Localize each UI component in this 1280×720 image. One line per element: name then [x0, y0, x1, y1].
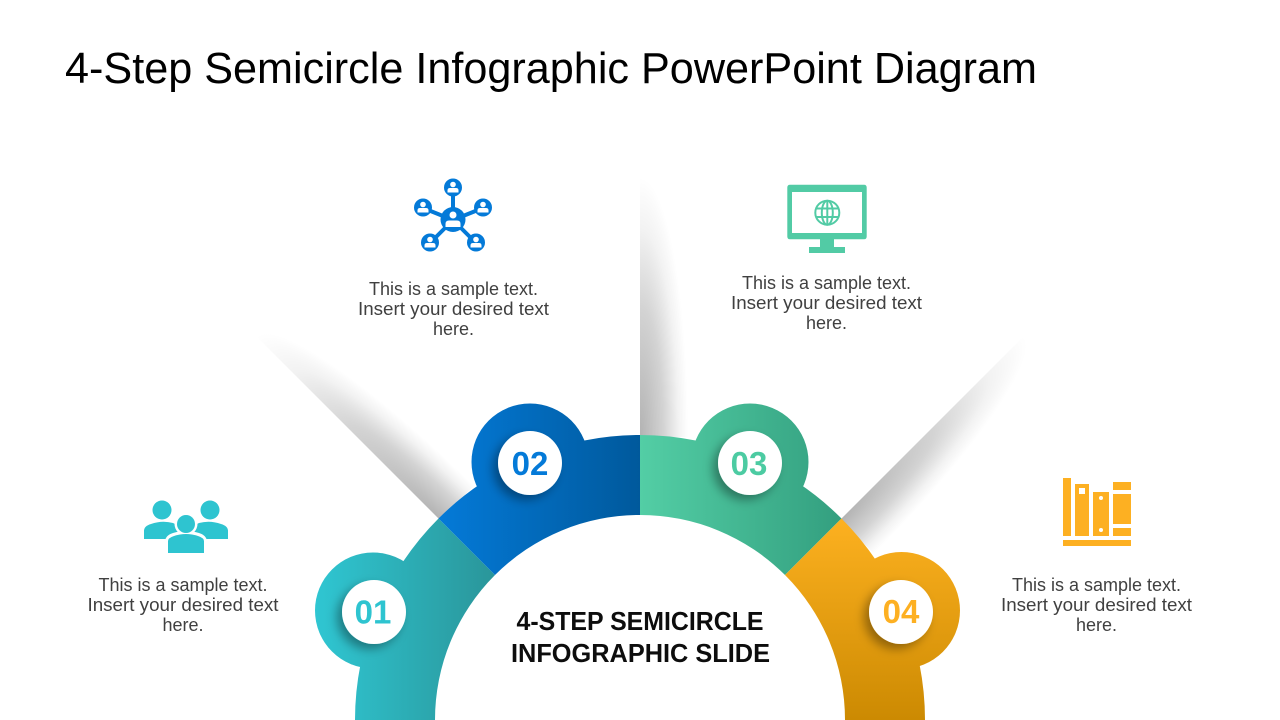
segment 02: 02: [512, 445, 548, 482]
shadow ray: right: [840, 335, 1061, 555]
text: step 01: [88, 575, 278, 635]
text: step 02: Insert your desired text: [358, 299, 549, 319]
segment 02: [438, 404, 640, 575]
icon: monitor with globe: [787, 185, 867, 253]
text: step 02: This is a sample text.: [369, 279, 538, 299]
segment 03: [640, 404, 842, 575]
text: step 04: This is a sample text.: [1012, 575, 1181, 595]
text: step 04: [1001, 575, 1192, 635]
shadow ray: centre: [640, 175, 690, 437]
text: step 03: This is a sample text.: [742, 273, 911, 293]
segment 04: 04: [883, 593, 920, 630]
text: step 04: here.: [1076, 615, 1117, 635]
centre heading: INFOGRAPHIC SLIDE: [511, 638, 770, 668]
text: step 03: Insert your desired text: [731, 293, 922, 313]
text: step 02: [358, 279, 549, 339]
segment 01: 01: [355, 594, 391, 630]
segment 03: 03: [731, 445, 767, 482]
text: step 03: here.: [806, 313, 847, 333]
icon: books on shelf: [1063, 478, 1131, 546]
title: 4-Step Semicircle Infographic PowerPoint Diagram: [65, 44, 1037, 93]
text: step 03: [731, 273, 922, 333]
text: step 01: Insert your desired text: [88, 595, 278, 615]
segment 01: [315, 518, 495, 720]
icon: people group: [144, 500, 228, 556]
text: step 01: This is a sample text.: [98, 575, 268, 595]
icon: network of people: [414, 178, 492, 252]
segment 04: [785, 518, 960, 720]
shadow ray: left: [255, 299, 475, 520]
text: step 02: here.: [433, 319, 474, 339]
text: step 04: Insert your desired text: [1001, 595, 1192, 615]
centre heading: [511, 606, 770, 668]
text: step 01: here.: [162, 615, 204, 635]
centre heading: 4-STEP SEMICIRCLE: [516, 606, 764, 636]
